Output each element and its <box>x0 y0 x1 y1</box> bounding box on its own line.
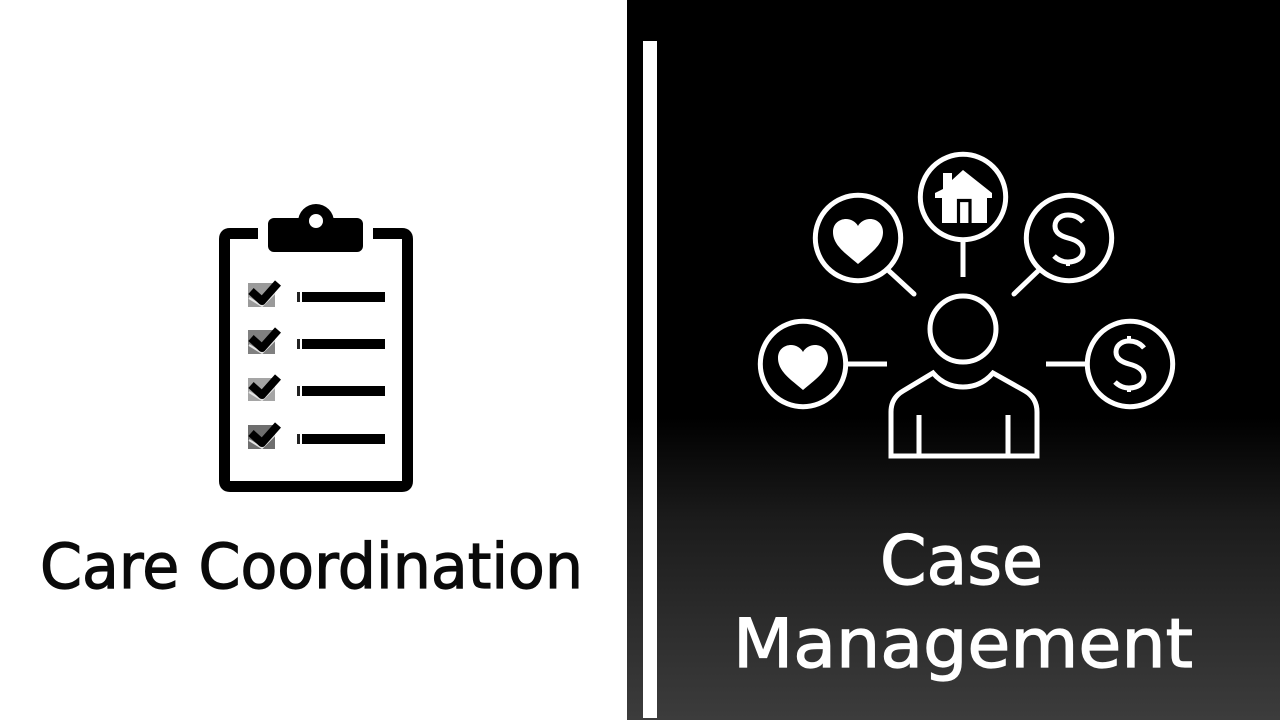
checklist row 4 <box>248 425 385 449</box>
icon: clipboard checklist <box>224 204 408 486</box>
need: health upper <box>815 195 914 294</box>
divider bar <box>643 41 657 718</box>
checklist row 3 <box>248 377 385 401</box>
checklist row 2 <box>248 330 385 354</box>
need: finance upper <box>1014 195 1112 294</box>
heading: care coordination: Care Coordination <box>40 530 583 603</box>
checklist row 1 <box>248 283 385 307</box>
person <box>891 296 1037 456</box>
heading: case management: Case <box>880 522 1043 601</box>
panel: care coordination <box>0 0 627 720</box>
need: finance right <box>1046 321 1173 407</box>
need: housing <box>920 154 1006 277</box>
heading: case management: Management <box>733 605 1193 684</box>
heading: case management <box>733 522 1193 684</box>
icon: case manager with needs <box>760 154 1173 456</box>
panel: case management <box>627 0 1280 720</box>
need: health left <box>760 321 887 407</box>
